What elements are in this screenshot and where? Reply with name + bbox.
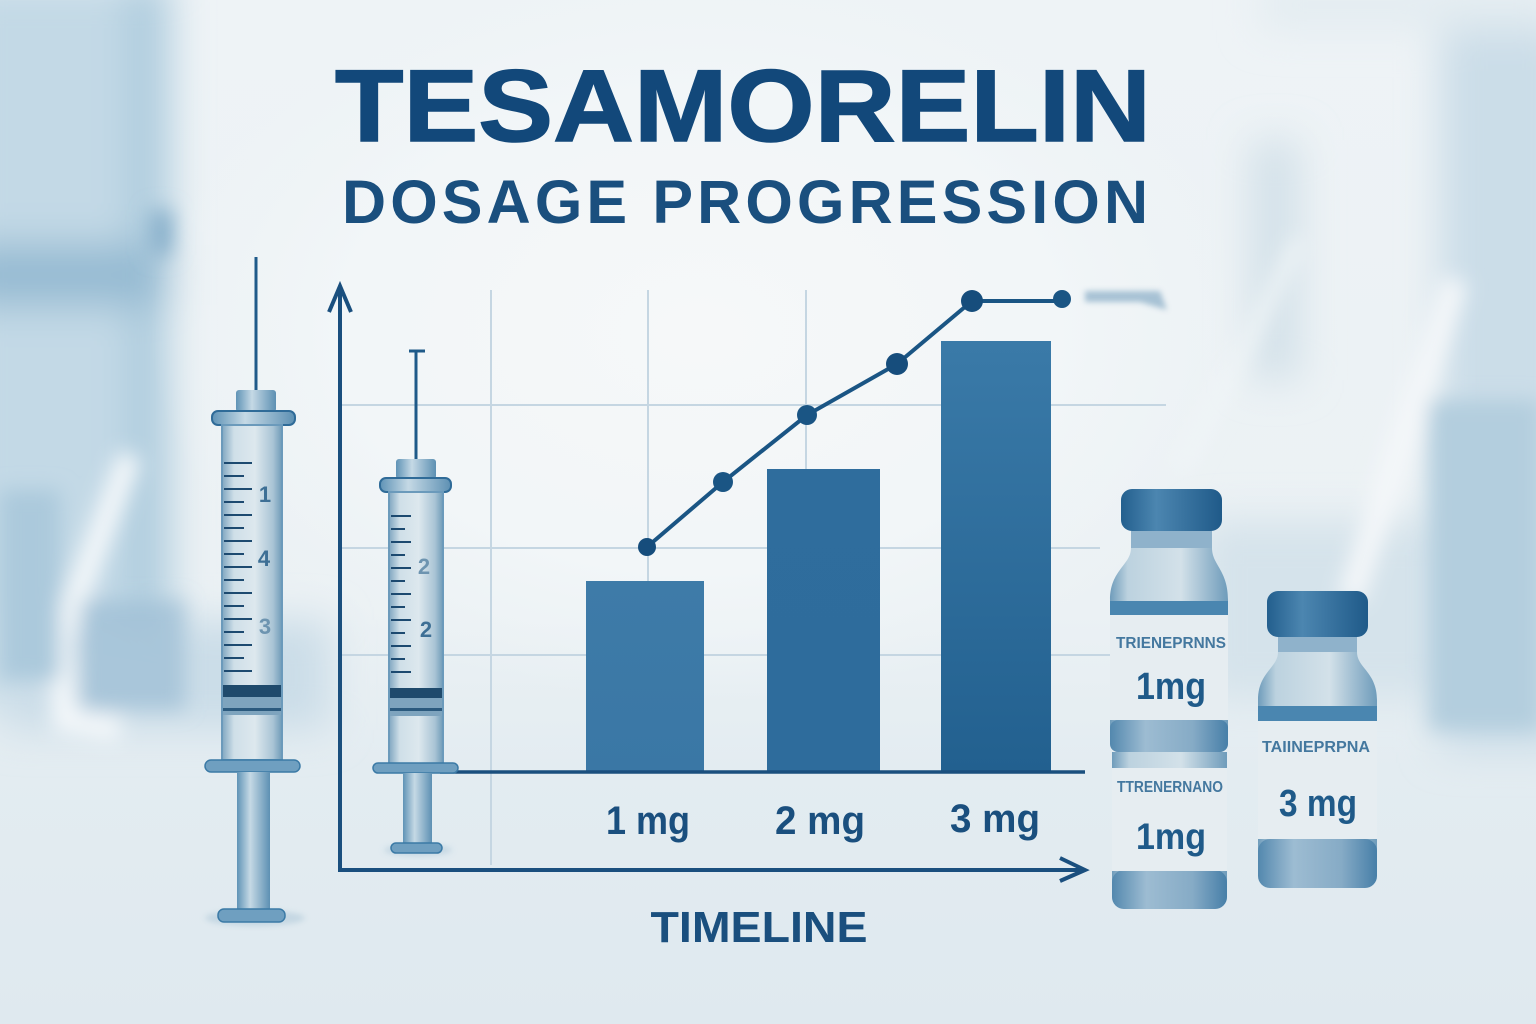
- subtitle: DOSAGE PROGRESSION: [342, 168, 1148, 236]
- syringe: large left: [205, 257, 305, 926]
- vial: top 1 mg: [1110, 489, 1228, 752]
- chart: dosage progression over timeline: [329, 286, 1167, 952]
- plunger stopper: [390, 688, 442, 698]
- plunger stopper: [223, 685, 281, 697]
- syringe: large left: 4: [258, 546, 271, 571]
- barrel: [222, 425, 282, 760]
- trend line with data points: [638, 290, 1071, 556]
- plunger rod: [237, 772, 270, 910]
- vial: bottom 1 mg: [1112, 752, 1227, 909]
- title: TESAMORELIN: [335, 49, 1151, 163]
- faded smudge at line end: [1085, 291, 1167, 310]
- syringe: large left: 3: [259, 614, 271, 639]
- needle: [409, 350, 425, 460]
- vial: right 3 mg: TAIINEPRPNA: [1262, 739, 1370, 756]
- baseline: [440, 770, 1085, 774]
- cap: [1267, 591, 1368, 637]
- vial: bottom 1 mg: TTRENERNANO: [1117, 779, 1223, 796]
- barrel numbers: 2: [418, 554, 430, 579]
- axis label: timeline: TIMELINE: [650, 903, 868, 952]
- grid lines: [340, 290, 1166, 865]
- graduation marks: [224, 463, 252, 671]
- label: [1258, 721, 1377, 839]
- finger flange: [205, 760, 300, 772]
- vial: right 3 mg: [1258, 591, 1377, 888]
- barrel: [389, 492, 443, 764]
- label: [1112, 768, 1227, 871]
- bar: 2 mg: [767, 469, 880, 772]
- y axis arrow: [329, 286, 351, 870]
- vial: right 3 mg: 3 mg: [1279, 783, 1357, 825]
- barrel numbers: 1: [259, 482, 271, 507]
- syringe: small centre-left: 2: [420, 617, 432, 642]
- graduation marks: [391, 516, 411, 672]
- vial: top 1 mg: TRIENEPRNNS: [1116, 635, 1226, 652]
- needle: [254, 257, 258, 390]
- cap: [1121, 489, 1222, 531]
- label: [1110, 615, 1228, 720]
- dose label: 3 mg: 3 mg: [950, 797, 1040, 841]
- bar: 3 mg: [941, 341, 1051, 772]
- hub: [236, 390, 276, 412]
- dose label: 1 mg: 1 mg: [606, 799, 690, 843]
- hub: [396, 459, 436, 479]
- glass body: [1110, 548, 1228, 752]
- vial: bottom 1 mg: 1mg: [1136, 816, 1206, 857]
- vial: top 1 mg: 1mg: [1136, 666, 1206, 708]
- plunger rod: [403, 773, 432, 843]
- bar: 1 mg: [586, 581, 704, 772]
- finger flange: [373, 763, 458, 773]
- glass body: [1258, 652, 1377, 888]
- syringe: small centre-left: [373, 350, 458, 856]
- x axis arrow: [338, 858, 1085, 881]
- dose label: 2 mg: 2 mg: [775, 799, 865, 843]
